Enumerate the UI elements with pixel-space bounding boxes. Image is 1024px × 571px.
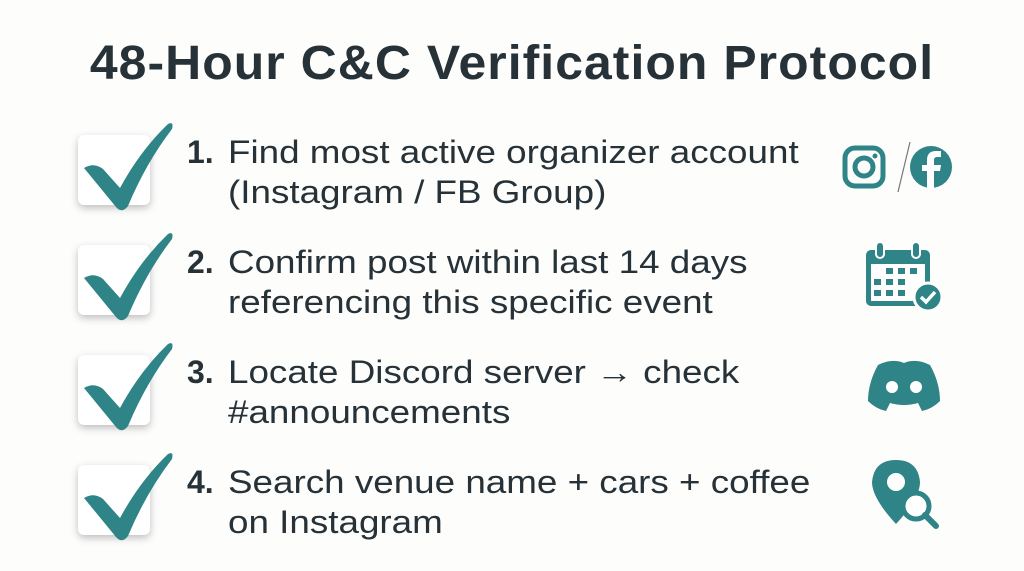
icon: location search xyxy=(872,460,939,529)
text 3 xyxy=(228,354,740,430)
icon: discord xyxy=(868,360,940,411)
row 3 xyxy=(74,343,740,432)
text 1: (Instagram / FB Group) xyxy=(228,174,606,210)
row 4 xyxy=(74,453,810,542)
text 3: Locate Discord server → check xyxy=(228,354,739,390)
text 1: Find most active organizer account xyxy=(228,134,799,170)
number 3: 3. xyxy=(187,354,214,390)
title: 48-Hour C&C Verification Protocol xyxy=(90,37,934,90)
text 2 xyxy=(228,244,748,320)
row 2 xyxy=(74,233,748,322)
number 2: 2. xyxy=(187,244,214,280)
icon: instagram / facebook xyxy=(842,142,952,192)
text 2: referencing this specific event xyxy=(228,284,713,320)
number 1: 1. xyxy=(187,134,214,170)
text 4: Search venue name + cars + coffee xyxy=(228,464,810,500)
text 4 xyxy=(228,464,810,540)
text 2: Confirm post within last 14 days xyxy=(228,244,748,280)
number 4: 4. xyxy=(187,464,214,500)
icon: calendar xyxy=(866,243,940,310)
checkbox 1 xyxy=(78,135,150,205)
text 3: #announcements xyxy=(228,394,510,430)
text 1 xyxy=(228,134,799,210)
row 1 xyxy=(74,123,799,212)
text 4: on Instagram xyxy=(228,504,443,540)
